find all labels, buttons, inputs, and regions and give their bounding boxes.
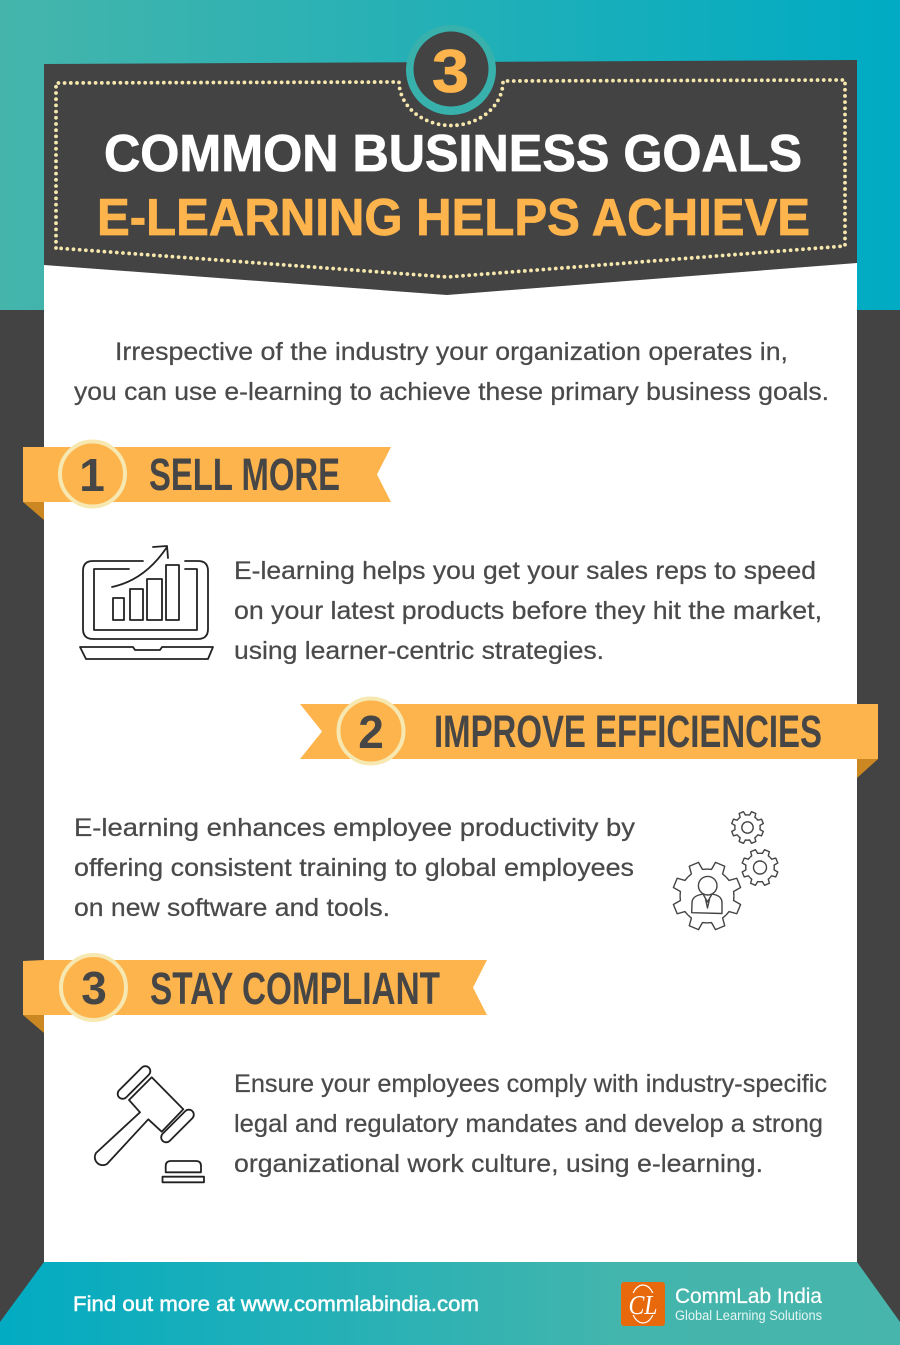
logo mark xyxy=(621,1282,665,1326)
logo mark: CL xyxy=(628,1290,658,1320)
ribbon: improve efficiencies: 2 xyxy=(358,706,384,758)
text: sell more: on your latest products before they hit the market, xyxy=(234,597,822,625)
text: sell more xyxy=(234,557,822,665)
logo tagline: Global Learning Solutions xyxy=(675,1308,822,1323)
number badge: 3 xyxy=(432,38,469,105)
text: sell more: E-learning helps you get your sales reps to speed xyxy=(234,557,816,585)
panel: white content xyxy=(44,250,857,1270)
ribbon: stay compliant: 3 xyxy=(81,962,107,1014)
logo name: CommLab India xyxy=(675,1285,822,1308)
intro text: Irrespective of the industry your organization operates in, xyxy=(115,338,788,366)
icon: laptop with growth chart xyxy=(80,546,213,659)
text: sell more: using learner-centric strategies. xyxy=(234,637,604,665)
ribbon: stay compliant xyxy=(23,955,487,1033)
text: improve efficiencies: on new software and tools. xyxy=(74,894,390,922)
ribbon: improve efficiencies xyxy=(300,698,878,778)
header banner xyxy=(44,25,857,295)
intro text xyxy=(74,338,829,406)
ribbon: sell more: 1 xyxy=(79,449,105,501)
ribbon: sell more xyxy=(23,442,391,520)
footer link text: Find out more at www.commlabindia.com xyxy=(73,1293,479,1316)
text: stay compliant: legal and regulatory mandates and develop a strong xyxy=(234,1110,823,1138)
text: improve efficiencies: E-learning enhances employee productivity by xyxy=(74,814,636,842)
text: improve efficiencies: offering consistent training to global employees xyxy=(74,854,634,882)
ribbon: sell more: SELL MORE xyxy=(149,449,340,500)
number badge xyxy=(406,25,496,115)
text: stay compliant: organizational work culture, using e-learning. xyxy=(234,1150,763,1178)
icon: gears with person xyxy=(662,806,784,941)
title line 2: E-LEARNING HELPS ACHIEVE xyxy=(97,189,810,247)
title line 1: COMMON BUSINESS GOALS xyxy=(104,125,802,183)
ribbon: stay compliant: STAY COMPLIANT xyxy=(150,963,440,1014)
text: improve efficiencies xyxy=(74,814,636,922)
text: stay compliant: Ensure your employees comply with industry-specific xyxy=(234,1070,827,1098)
icon: gavel xyxy=(95,1064,204,1182)
dotted border xyxy=(56,80,845,277)
text: stay compliant xyxy=(234,1070,827,1178)
footer bar xyxy=(0,1262,900,1345)
intro text: you can use e-learning to achieve these primary business goals. xyxy=(74,378,829,406)
